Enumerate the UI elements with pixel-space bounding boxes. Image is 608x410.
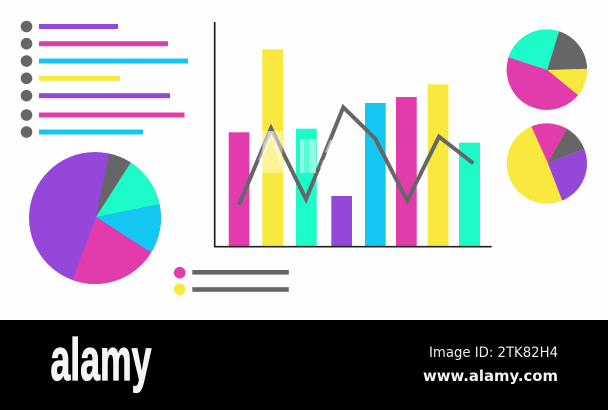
list row 1 bbox=[21, 21, 118, 32]
large pie chart bbox=[29, 152, 161, 284]
bar 1 bbox=[229, 132, 249, 247]
logo text: alamy bbox=[50, 327, 152, 393]
bar 2 bbox=[262, 49, 283, 247]
line series bbox=[239, 107, 473, 205]
bar 7 bbox=[428, 84, 448, 247]
list row 2 bbox=[21, 38, 168, 50]
bar 6 bbox=[396, 97, 417, 247]
bar 4 bbox=[331, 196, 352, 247]
chart: bars with line bbox=[215, 22, 492, 247]
pie chart lower right bbox=[506, 123, 587, 204]
legend item pink bbox=[174, 267, 289, 279]
legend bbox=[174, 267, 289, 295]
panel: list of coloured bars bbox=[21, 21, 188, 138]
watermark ghost bbox=[258, 131, 334, 173]
image id text: Image ID: 2TK82H4 bbox=[429, 345, 558, 361]
list row 5 bbox=[21, 90, 170, 101]
legend item yellow bbox=[174, 284, 289, 295]
bar 3 bbox=[296, 129, 317, 247]
website text: www.alamy.com bbox=[423, 367, 558, 385]
bar 8 bbox=[459, 143, 480, 247]
footer band bbox=[0, 320, 608, 410]
list row 6 bbox=[21, 109, 185, 121]
list row 7 bbox=[21, 126, 143, 138]
pie chart top right bbox=[506, 29, 588, 110]
list row 3 bbox=[21, 55, 188, 67]
axes bbox=[215, 22, 492, 247]
bar 5 bbox=[365, 103, 386, 247]
list row 4 bbox=[21, 72, 120, 84]
